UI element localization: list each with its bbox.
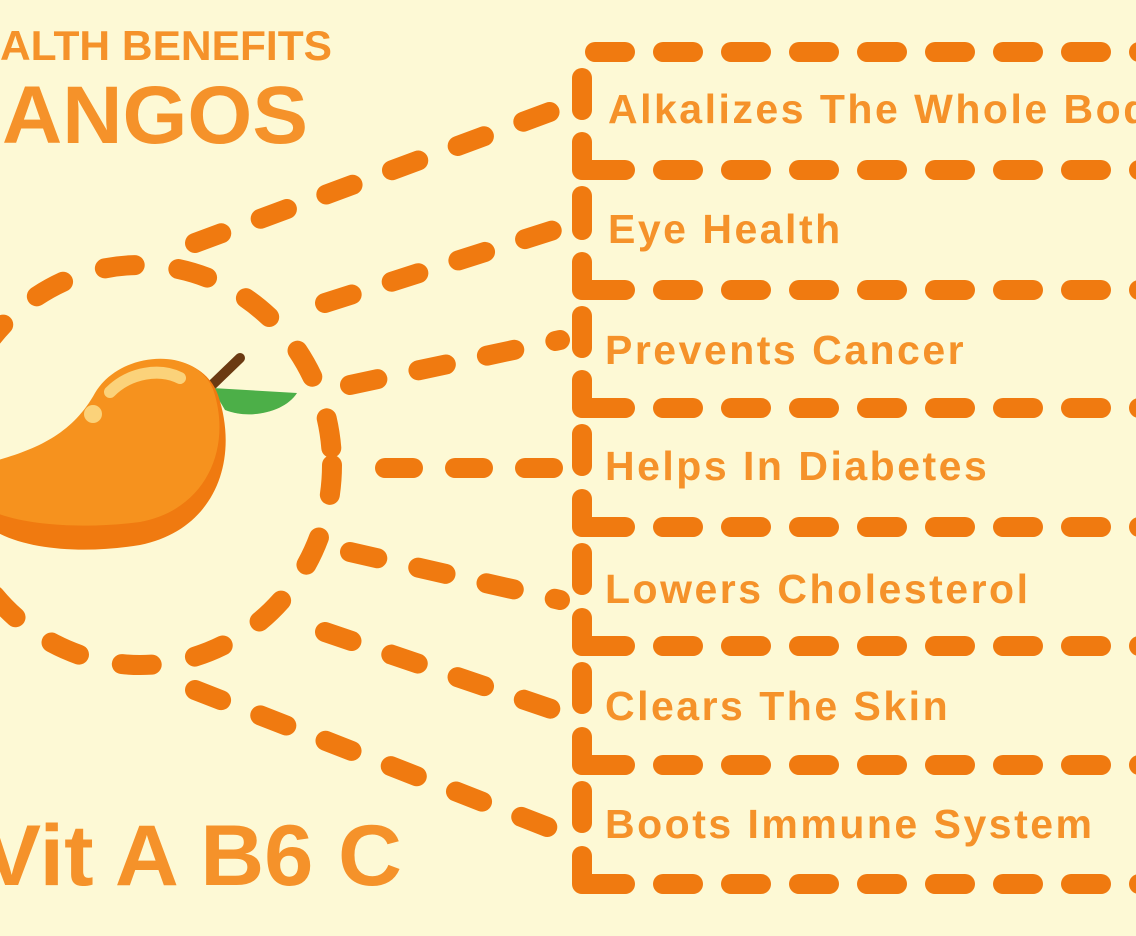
title: ALTH BENEFITS (0, 22, 332, 69)
icon: mango (0, 358, 297, 550)
benefit labels: Prevents Cancer (605, 327, 966, 373)
benefit labels: Helps In Diabetes (605, 443, 989, 489)
connector arrows (195, 110, 560, 830)
benefit labels: Boots Immune System (605, 801, 1094, 847)
dashed circle (0, 265, 332, 665)
title (0, 22, 332, 161)
benefit labels: Lowers Cholesterol (605, 566, 1030, 612)
benefit labels: Eye Health (608, 206, 843, 252)
benefit labels: Clears The Skin (605, 683, 950, 729)
benefit labels (605, 86, 1136, 847)
panel: benefit boxes (582, 52, 1136, 884)
title: ANGOS (2, 70, 308, 161)
